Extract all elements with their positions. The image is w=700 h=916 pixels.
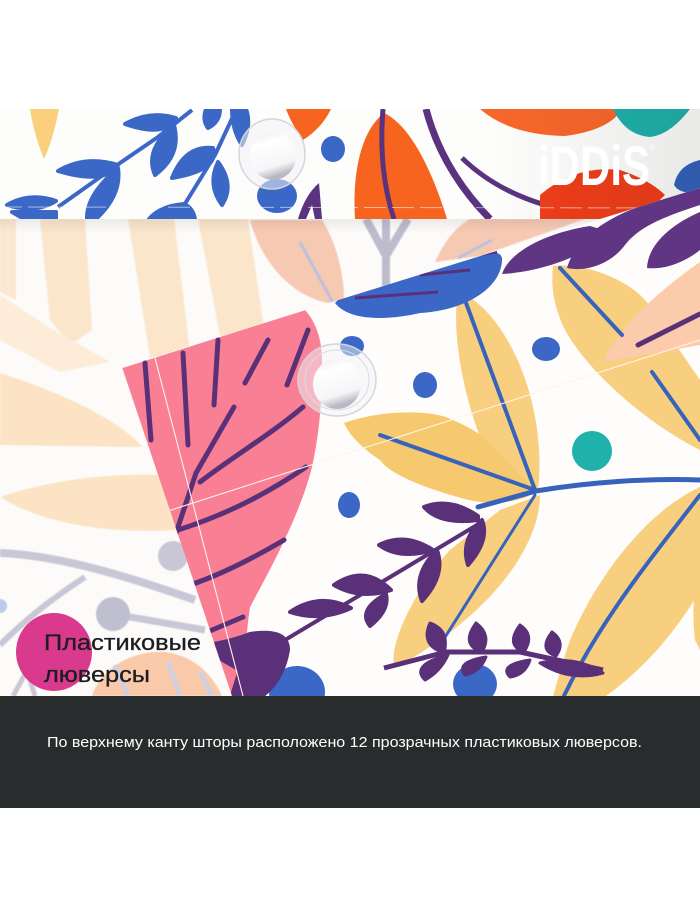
heading: plastic eyelets: люверсы xyxy=(44,662,150,687)
badge: pink circle xyxy=(16,613,92,691)
panel: top hem with print xyxy=(0,109,700,219)
dots xyxy=(269,336,560,718)
panel: lower back fabric with faded print xyxy=(0,219,585,696)
purple branch diagonal xyxy=(214,504,484,696)
purple vein on peach leaf xyxy=(638,314,700,345)
blue veins xyxy=(380,268,700,700)
peach leaf right xyxy=(603,262,700,362)
hem shadow xyxy=(0,219,600,226)
logo: iDDiS xyxy=(552,144,655,186)
eyelet: top grommet xyxy=(239,119,305,189)
panel: caption band xyxy=(0,696,700,808)
pink leaf with veins xyxy=(110,310,322,700)
heading: plastic eyelets: Пластиковые xyxy=(44,630,201,655)
purple leaves upper right xyxy=(502,188,700,274)
blue branches xyxy=(7,109,248,219)
purple branch horizontal xyxy=(384,623,603,680)
blue leaf at fold xyxy=(335,252,502,318)
eyelet: flap grommet xyxy=(298,344,376,416)
logo: iDDiS: ® xyxy=(650,144,656,152)
hem stitching xyxy=(0,207,700,208)
logo: iDDiS: iDDiS xyxy=(538,134,650,197)
yellow leaves xyxy=(344,266,700,700)
stitching lines xyxy=(155,340,700,696)
caption text: По верхнему канту шторы расположено 12 прозрачных пластиковых люверсов. xyxy=(47,734,642,751)
panel: front flap with print xyxy=(122,188,700,696)
photo: curtain fabric xyxy=(0,109,700,718)
grey branches xyxy=(0,553,205,696)
